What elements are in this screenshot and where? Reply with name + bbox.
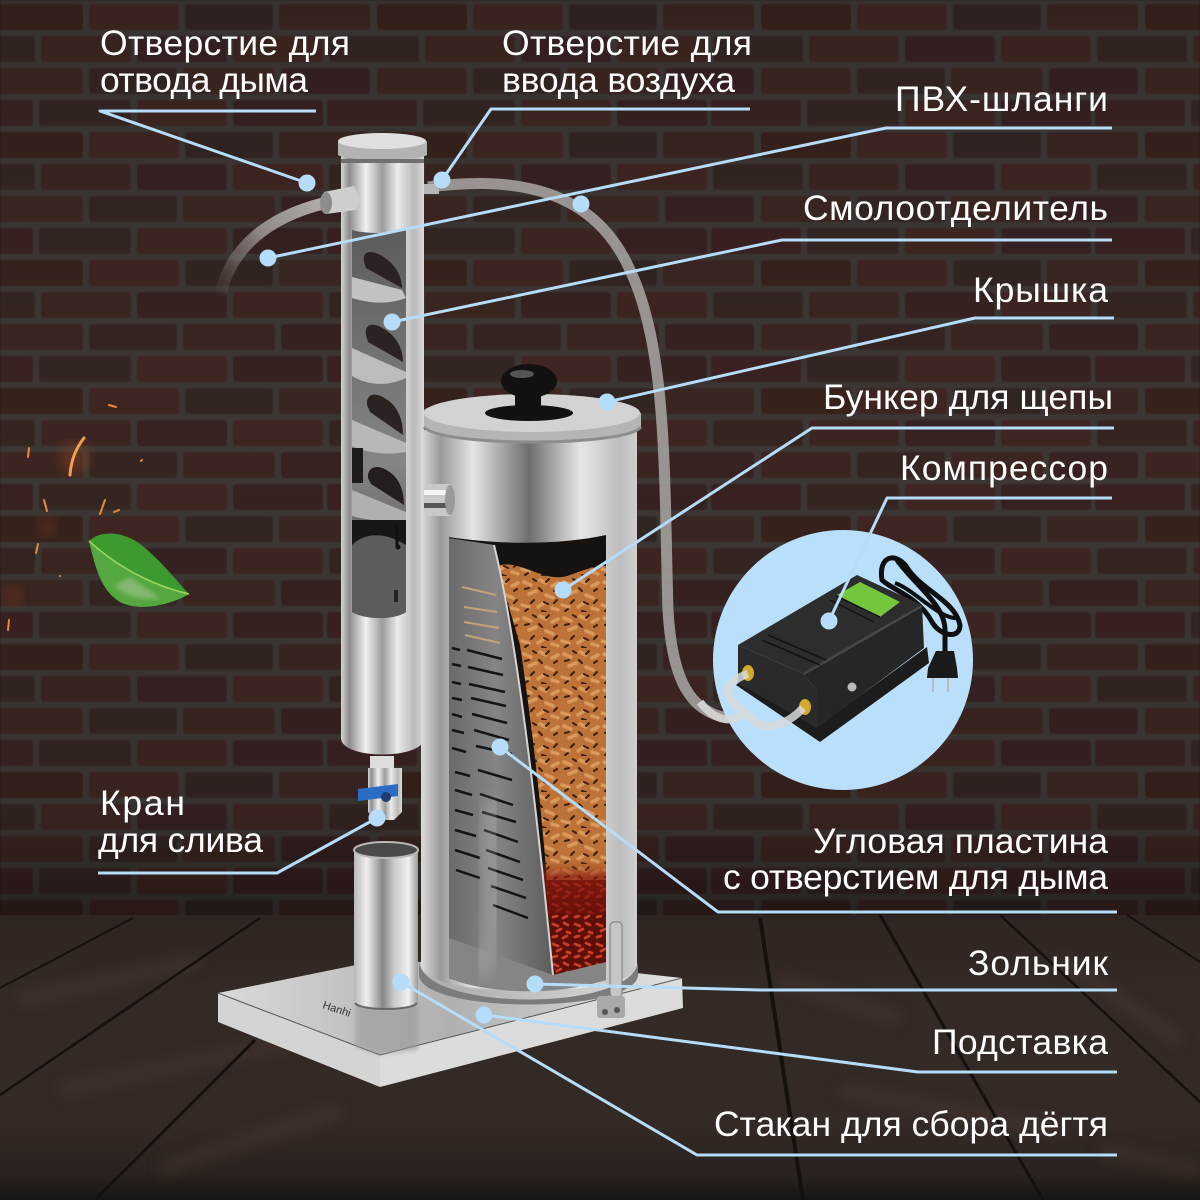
background: wooden floor — [0, 915, 1200, 1200]
callout leader: крышка — [598, 318, 1114, 410]
base plate: Hanhi — [321, 999, 352, 1020]
callout leader: смолоотделитель — [384, 240, 1112, 330]
label: кран для слива — [98, 783, 263, 860]
compressor circle background — [713, 530, 973, 790]
label: подставка: Подставка — [932, 1022, 1108, 1062]
callout leader: стакан — [392, 974, 1117, 1155]
wood chips — [497, 564, 606, 977]
callout leader: угловая пластина — [492, 738, 1117, 912]
compressor power cord and plug — [881, 558, 960, 692]
base plate — [218, 958, 683, 1087]
smoke — [480, 800, 495, 975]
tank latch — [597, 922, 625, 1018]
column tube — [341, 155, 424, 754]
tank body — [421, 430, 637, 991]
label: отверстие для ввода воздуха — [502, 23, 752, 100]
drain valve — [358, 756, 402, 820]
tank lid — [424, 394, 641, 443]
label: стакан для сбора дёгтя: Стакан для сбора дёгтя — [714, 1104, 1108, 1144]
label: угловая пластина: с отверстием для дыма — [723, 857, 1108, 897]
label: компрессор: Компрессор — [900, 448, 1108, 488]
ash tray — [449, 938, 606, 991]
callout leader: бункер — [554, 428, 1114, 598]
callout leader: зольник — [526, 976, 1117, 992]
label: отверстие для ввода воздуха: Отверстие для — [502, 23, 752, 63]
baffles — [352, 252, 406, 618]
label: крышка: Крышка — [973, 270, 1108, 310]
callout leader: компрессор — [820, 498, 1112, 630]
callout leader: кран — [98, 810, 386, 873]
callout leader: отвод дыма — [100, 111, 316, 192]
label: зольник: Зольник — [968, 943, 1108, 983]
decoration: sparks — [3, 405, 142, 630]
lid knob — [485, 364, 573, 421]
label: угловая пластина — [723, 821, 1108, 897]
callout leader: ввод воздуха — [434, 109, 750, 188]
label: бункер для щепы: Бункер для щепы — [823, 377, 1113, 417]
tank bottom ring — [419, 962, 638, 1004]
side pipe — [424, 484, 455, 516]
glowing coals — [546, 880, 606, 977]
callout leader: ПВХ-шланги — [260, 128, 1112, 266]
tank cutaway window — [449, 535, 606, 991]
label: смолоотделитель: Смолоотделитель — [803, 188, 1108, 228]
label: угловая пластина: Угловая пластина — [813, 821, 1108, 861]
callout leader: подставка — [476, 1006, 1117, 1072]
label: ПВХ-шланги: ПВХ-шланги — [895, 79, 1108, 119]
drain cup — [354, 842, 418, 1009]
label: отверстие для отвода дыма — [100, 23, 350, 100]
column cap — [338, 133, 427, 163]
smoke chamber tank — [419, 364, 641, 1018]
icon: green leaf — [89, 533, 189, 607]
compressor — [700, 530, 973, 790]
label: отверстие для отвода дыма: Отверстие для — [100, 23, 350, 63]
upper outlet pipe — [320, 184, 439, 214]
smoke tar separator column — [320, 133, 439, 754]
label: кран для слива: Кран — [100, 783, 185, 823]
column window — [352, 230, 406, 618]
compressor hoses — [700, 674, 803, 726]
compressor body — [736, 575, 929, 742]
angled plate with slots — [449, 538, 553, 975]
label: отверстие для отвода дыма: отвода дыма — [100, 60, 308, 100]
right hose to compressor — [428, 183, 728, 718]
left hose — [220, 201, 334, 296]
label: отверстие для ввода воздуха: ввода воздуха — [502, 60, 735, 100]
label: кран для слива: для слива — [98, 820, 263, 860]
background: brick wall — [0, 0, 1200, 920]
